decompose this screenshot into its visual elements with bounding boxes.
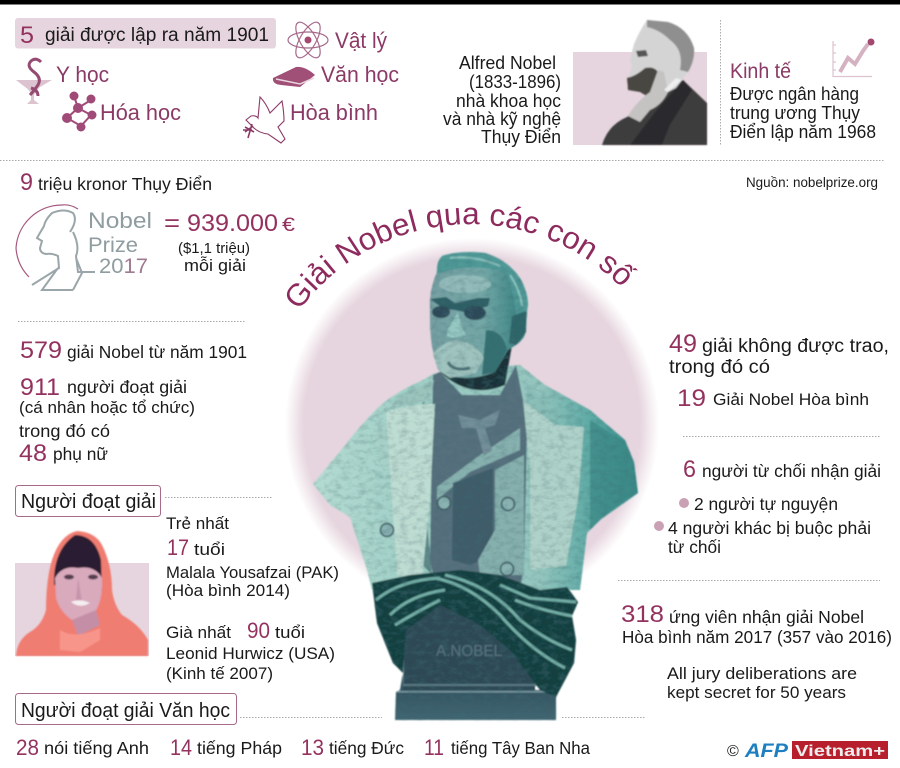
text block: Economics prize: Kinh tế [730, 60, 791, 83]
stat: 911 laureates: trong đó có [19, 421, 110, 441]
prize amount in euros [164, 210, 296, 275]
stat: 911 laureates: phụ nữ [53, 444, 108, 464]
stat: 318 peace prize nominees: Hòa bình năm 2017 (357 vào 2016) [622, 627, 892, 647]
photo: Malala Yousafzai [15, 531, 149, 656]
text block: youngest laureate: (Hòa bình 2014) [166, 581, 290, 600]
stats: languages of literature laureates: 11 [424, 735, 444, 760]
prize amount in euros: mỗi giải [184, 256, 246, 275]
stat: 49 prizes not awarded: trong đó có [669, 357, 770, 378]
stats: languages of literature laureates: tiếng Pháp [197, 738, 282, 758]
prize amount in kronor: triệu kronor Thụy Điển [38, 174, 212, 194]
stats: languages of literature laureates: tiếng Tây Ban Nha [451, 738, 590, 758]
heading: literature laureates [16, 694, 236, 724]
text block: Economics prize: Được ngân hàng [730, 84, 859, 104]
stat: 579 prizes: giải Nobel từ năm 1901 [67, 342, 247, 362]
stats: languages of literature laureates: nói tiếng Anh [44, 738, 149, 758]
text block: Economics prize [730, 60, 876, 142]
prize amount in euros: € [282, 215, 296, 236]
stat: 911 laureates: 911 [20, 374, 60, 401]
heading: laureates [16, 486, 160, 516]
icon: atom, physics [288, 19, 328, 61]
divider [618, 580, 880, 582]
stat: 6 people declined: người từ chối nhận giải [702, 461, 881, 481]
icon: bowl of Hygieia, medicine [16, 59, 52, 104]
text block: Alfred Nobel biography: Thụy Điển [481, 127, 561, 147]
statue: pedestal [395, 595, 556, 720]
stat: 6 people declined: từ chối [668, 537, 721, 557]
prize amount in kronor [20, 169, 212, 196]
statue: buttons [380, 496, 514, 576]
label: Hòa bình: Hòa bình [290, 100, 378, 125]
logo: AFP Vietnam+ credit: AFP [744, 741, 788, 762]
label: Vật lý: Vật lý [335, 28, 387, 53]
stat: 318 peace prize nominees: ứng viên nhận giải Nobel [669, 607, 864, 627]
background circle [285, 238, 659, 612]
logo: Nobel Prize 2017 [16, 205, 152, 290]
divider [18, 320, 246, 322]
top black bar [0, 0, 900, 4]
stat: 318 peace prize nominees [621, 601, 892, 647]
stat: 6 people declined: 4 người khác bị buộc phải [668, 518, 871, 538]
text block: youngest laureate [166, 514, 339, 600]
text block: oldest laureate: tuổi [275, 623, 305, 642]
stat: 911 laureates [19, 374, 195, 467]
stat: 911 laureates: (cá nhân hoặc tổ chức) [19, 398, 195, 417]
statue: lapels [386, 404, 435, 580]
stat: 911 laureates: 48 [19, 440, 47, 467]
text block: oldest laureate: 90 [247, 618, 270, 643]
stat: 6 people declined: 6 [683, 456, 696, 483]
heading: 5 prizes established 1901: 5 [20, 22, 34, 49]
text block: Economics prize: Điển lập năm 1968 [730, 122, 876, 142]
statue: laurel wreath [372, 570, 578, 697]
text block: Alfred Nobel biography: nhà khoa học [456, 91, 561, 111]
source note: Nguồn: nobelprize.org [746, 175, 878, 190]
text block: oldest laureate: Leonid Hurwicz (USA) [166, 644, 335, 663]
label: Văn học: Văn học [321, 62, 399, 87]
logo: AFP Vietnam+ credit: © [727, 743, 739, 760]
stat: 49 prizes not awarded [669, 330, 889, 412]
text block: oldest laureate [166, 618, 335, 683]
title on arc: Giải Nobel qua các con số [286, 206, 638, 306]
stat: 49 prizes not awarded: giải không được trao, [702, 336, 889, 357]
heading: 5 prizes established 1901 [15, 18, 276, 49]
label: Hóa học: Hóa học [100, 100, 181, 125]
label: Y học: Y học [56, 62, 109, 87]
stat: 49 prizes not awarded: 19 [677, 385, 706, 412]
statue of Alfred Nobel [313, 252, 638, 720]
vertical dotted divider [720, 20, 722, 145]
stats: languages of literature laureates: 13 [301, 735, 324, 760]
prize amount in kronor: 9 [20, 169, 33, 196]
stat: 911 laureates: người đoạt giải [67, 377, 187, 397]
logo: AFP Vietnam+ credit [727, 741, 888, 762]
stats: languages of literature laureates: 14 [170, 735, 192, 760]
text block: youngest laureate: Malala Yousafzai (PAK) [166, 563, 339, 582]
text block: Alfred Nobel biography: Alfred Nobel [459, 53, 556, 73]
icon: book, literature [273, 67, 315, 87]
stat: 579 prizes: 579 [20, 337, 62, 364]
logo: Nobel Prize 2017: Nobel [88, 208, 152, 233]
stats: languages of literature laureates [16, 735, 590, 760]
icon: rising chart [833, 38, 874, 76]
heading: literature laureates: Người đoạt giải Văn học [21, 700, 230, 722]
logo: AFP Vietnam+ credit: Vietnam+ [795, 743, 885, 760]
heading: 5 prizes established 1901: giải được lập ra năm 1901 [45, 25, 269, 46]
logo: Nobel Prize 2017: Prize [88, 234, 138, 257]
text block: Economics prize: trung ương Thụy [730, 103, 860, 123]
text block: youngest laureate: tuổi [194, 540, 225, 559]
text block: youngest laureate: Trẻ nhất [166, 514, 229, 533]
statue: bow tie [458, 410, 500, 456]
prize amount in euros: ($1,1 triệu) [178, 240, 250, 257]
prize amount in euros: 939.000 [187, 210, 278, 237]
stats: languages of literature laureates: 28 [16, 735, 39, 760]
note: jury secrecy [667, 664, 857, 702]
text block: Alfred Nobel biography: (1833-1896) [469, 72, 561, 92]
stat: 579 prizes [20, 337, 247, 364]
stat: 49 prizes not awarded: Giải Nobel Hòa bình [713, 390, 869, 409]
text block: oldest laureate: Già nhất [166, 623, 231, 642]
stat: 318 peace prize nominees: 318 [621, 601, 664, 628]
stat: 6 people declined: 2 người tự nguyện [694, 494, 838, 514]
statue: coat silhouette [313, 365, 638, 590]
text block: youngest laureate: 17 [167, 535, 189, 560]
stat: 6 people declined [654, 456, 881, 557]
stats: languages of literature laureates: tiếng Đức [329, 738, 404, 758]
prize amount in euros: = [164, 210, 180, 237]
text block: Alfred Nobel biography [443, 53, 561, 147]
heading: laureates: Người đoạt giải [21, 491, 156, 513]
statue: dark coat shading [375, 385, 636, 575]
statue: waistcoat [430, 365, 527, 590]
statue: pedestal: A.NOBEL [436, 643, 502, 660]
stat: 49 prizes not awarded: 49 [669, 330, 697, 358]
note: jury secrecy: All jury deliberations are [667, 664, 857, 683]
logo: Nobel Prize 2017: 2017 [99, 255, 148, 278]
statue: neck shadow [440, 345, 512, 390]
statue: head [430, 252, 528, 378]
divider [683, 436, 880, 438]
icon: dove, peace [243, 97, 285, 143]
divider [0, 160, 885, 162]
text block: Alfred Nobel biography: và nhà kỹ nghệ [443, 109, 561, 129]
photo: portrait of Alfred Nobel [573, 20, 707, 145]
text block: oldest laureate: (Kinh tế 2007) [166, 664, 273, 683]
note: jury secrecy: kept secret for 50 years [667, 683, 846, 702]
icon: molecule, chemistry [63, 92, 96, 130]
